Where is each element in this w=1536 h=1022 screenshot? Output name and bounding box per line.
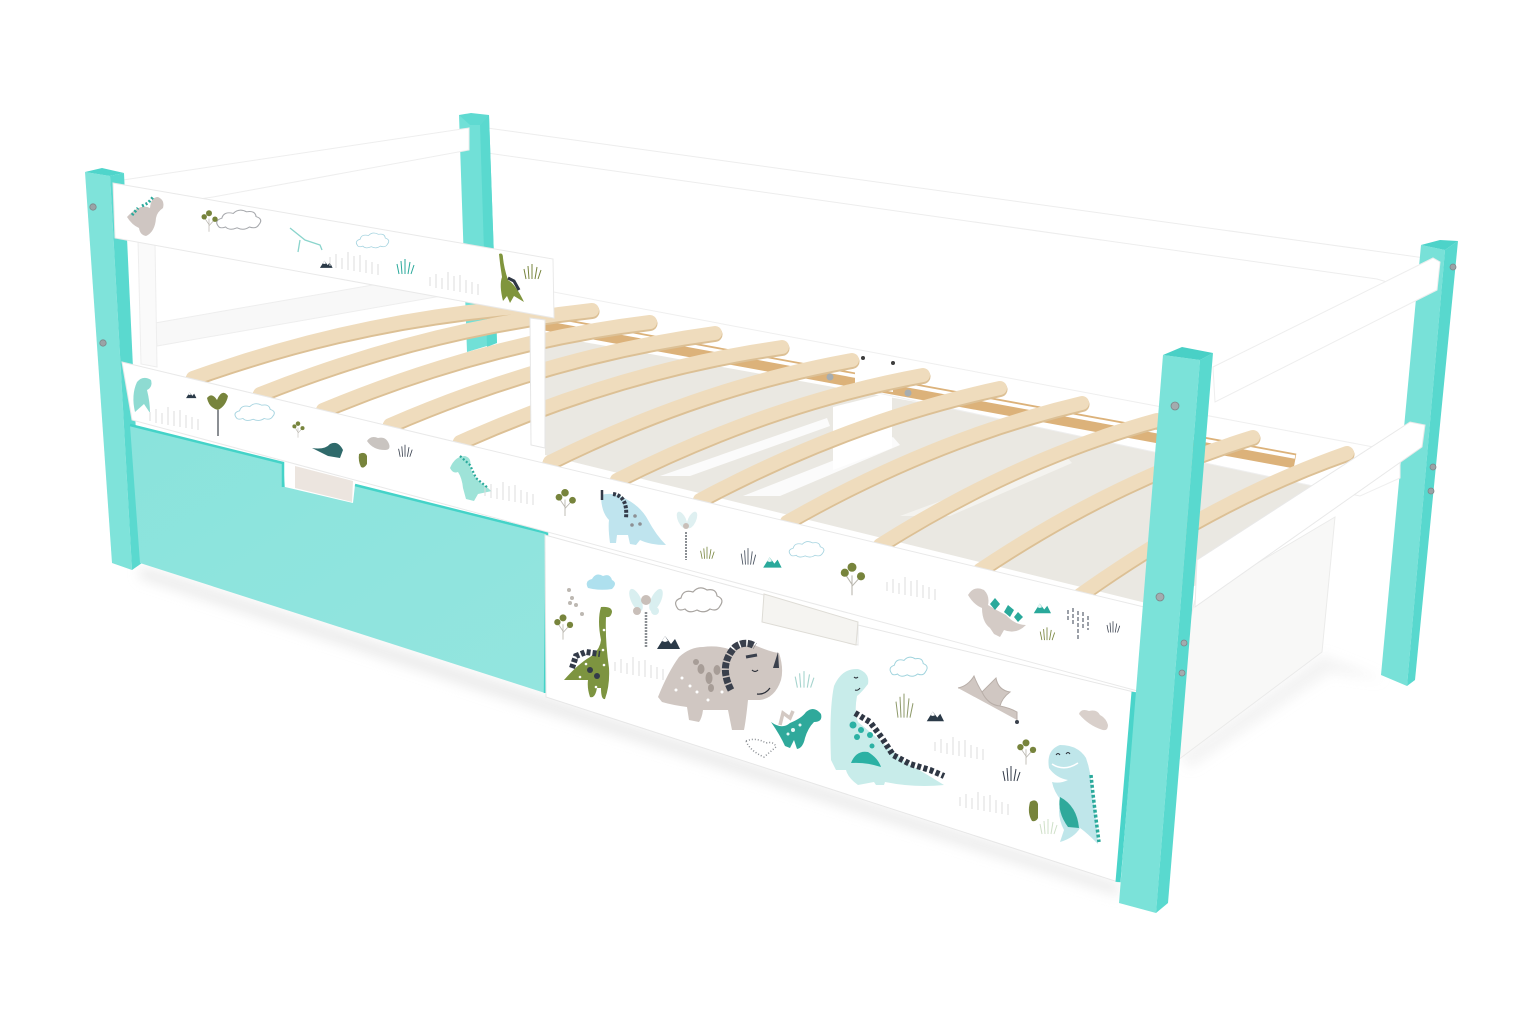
rail tree 2 — [556, 489, 576, 516]
rail tree 3 — [841, 563, 865, 595]
guard rail uprights — [138, 240, 545, 448]
rail twig 2 — [741, 548, 756, 565]
drawer cloud small — [890, 657, 927, 676]
drawer meadow — [615, 657, 663, 680]
drawer mountain dark — [657, 636, 680, 649]
rail twig 3 — [1107, 621, 1120, 632]
front rail with print — [122, 362, 1165, 695]
guard cloud left — [217, 210, 261, 229]
rail beige stego — [968, 588, 1026, 637]
rail blue triceratops — [601, 490, 666, 545]
guard dino beige — [127, 196, 163, 236]
drawer plant tall — [896, 694, 913, 718]
drawer grass right — [1040, 819, 1057, 834]
palm tree — [626, 587, 666, 648]
front right post — [1119, 347, 1213, 913]
rail mountain 1 — [186, 392, 196, 398]
rail twig — [399, 445, 412, 457]
white drawer handle — [762, 594, 858, 645]
rail grass 2 — [701, 547, 714, 559]
back right post — [1381, 240, 1458, 686]
rail teal dino — [450, 456, 492, 501]
guard mountain — [320, 261, 333, 268]
back left post — [459, 113, 497, 352]
beige cloud — [1079, 710, 1108, 730]
back long top rail — [480, 127, 1425, 292]
rail cactus — [359, 453, 367, 468]
green long-neck dino — [564, 607, 612, 699]
drawer cloud — [676, 588, 722, 612]
blue t-rex — [1048, 745, 1099, 844]
spot pattern — [567, 588, 584, 616]
guard meadow right — [430, 272, 478, 295]
white drawer — [545, 535, 1134, 882]
rail dino small — [133, 378, 152, 413]
teal drawer handle opening — [295, 466, 353, 502]
spotted bush — [746, 739, 776, 757]
guard grass — [397, 259, 414, 274]
rear drawer side — [1170, 517, 1335, 760]
left end lower rail — [155, 268, 470, 346]
big light blue dino — [830, 669, 944, 786]
rail meadow 3 — [887, 577, 935, 600]
rail palm — [207, 393, 228, 436]
back lower rail — [490, 280, 1400, 496]
drawer twig — [1003, 766, 1020, 781]
guard meadow — [330, 252, 378, 275]
interior under slats — [545, 335, 1360, 604]
rail tree 1 — [292, 421, 305, 438]
rail cloud 1 — [235, 404, 274, 420]
front post bolts — [1156, 402, 1187, 676]
cactus — [1029, 800, 1038, 821]
drawer tree right — [1017, 739, 1036, 765]
guard pterosaur — [290, 228, 322, 252]
drawer tree left — [554, 614, 573, 640]
rail grass 3 — [1040, 627, 1055, 640]
blue cloud — [587, 575, 615, 590]
pterosaur — [958, 676, 1019, 724]
guard green dino — [499, 254, 524, 303]
right end lower rail — [1195, 422, 1425, 607]
triceratops — [658, 643, 782, 730]
rail dashes — [1068, 608, 1088, 640]
guard rail panel with print — [113, 183, 554, 318]
floor shadow — [140, 566, 1385, 896]
drawer edge strip — [1118, 692, 1134, 882]
guard tree — [202, 210, 218, 232]
rail mountain teal — [763, 557, 782, 568]
rail tiny dino — [312, 443, 343, 458]
right end upper rail — [1213, 258, 1440, 402]
rail meadow — [150, 407, 198, 430]
left post bolts — [90, 204, 106, 346]
small teal dino — [771, 709, 821, 749]
guard cloud right — [356, 233, 389, 248]
left end top rail — [123, 128, 469, 210]
back post bolts — [1428, 264, 1456, 494]
bolts and holes — [826, 356, 912, 396]
rail meadow 2 — [485, 482, 533, 505]
rail mountain teal 2 — [1034, 604, 1051, 613]
rail cloud 2 — [789, 542, 824, 557]
drawer mountain — [927, 712, 944, 721]
teal drawer — [130, 425, 547, 693]
drawer meadow right — [935, 737, 983, 760]
rail beige cloud — [367, 437, 390, 450]
drawer plant — [795, 671, 814, 688]
left front post — [85, 168, 142, 570]
rail palm 2 — [675, 510, 699, 560]
guard grass right — [524, 264, 541, 279]
wooden slats — [193, 306, 1347, 596]
slat ledger strip — [545, 319, 1295, 461]
